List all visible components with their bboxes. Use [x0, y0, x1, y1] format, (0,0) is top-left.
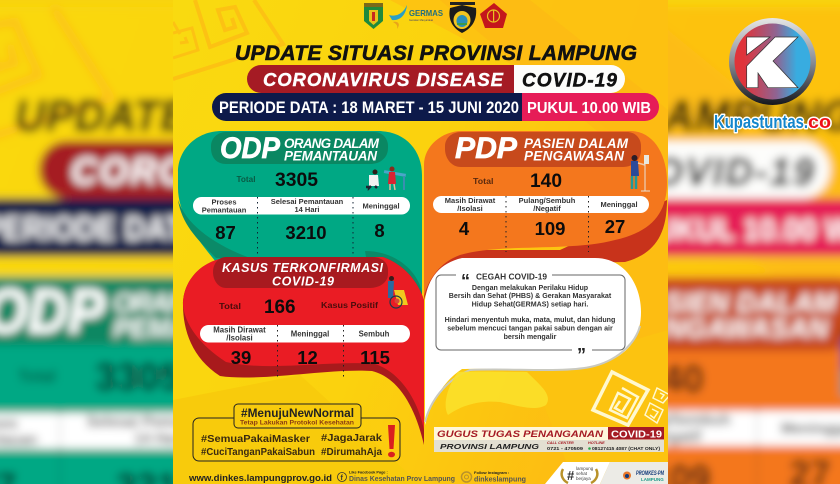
icon: lampung sehat: berjaya	[576, 476, 591, 481]
stat values: 8	[374, 220, 385, 241]
heading	[213, 257, 388, 288]
heading: PASIEN DALAM	[524, 136, 629, 151]
total	[219, 300, 378, 313]
poster	[173, 0, 670, 484]
stat values: 39	[231, 347, 251, 368]
stat values: 12	[297, 347, 318, 368]
panel: Cegah COVID-19: “	[461, 271, 470, 291]
blurred right background copy	[668, 7, 840, 484]
logo: Kupastuntas	[714, 18, 831, 132]
blurred left background copy	[0, 13, 173, 484]
heading: ODP	[220, 132, 281, 165]
stat labels pill: Proses	[211, 198, 237, 206]
panel: Cegah COVID-19: Dengan melakukan Perilaku Hidup	[472, 284, 589, 292]
decorative white spirals	[593, 372, 670, 425]
band: Gugus Tugas: GUGUS TUGAS PENANGANAN	[437, 429, 604, 440]
decorative spiral top-left	[173, 0, 283, 79]
total: 3305	[275, 170, 318, 191]
footer links: dinkeslampung	[474, 474, 526, 484]
banner: coronavirus disease: CORONAVIRUS DISEASE	[263, 69, 504, 90]
panel: Cegah COVID-19: Bersih dan Sehat (PHBS) & Gerakan Masyarakat	[449, 292, 612, 300]
icon: Promkes logo	[623, 471, 665, 482]
icon: K badge	[729, 18, 816, 105]
heading: COVID-19	[272, 274, 334, 288]
total: Total	[236, 174, 256, 184]
band: Gugus Tugas: 08127415 4087 (CHAT ONLY)	[592, 446, 661, 451]
footer logos	[545, 462, 668, 484]
stat labels pill: Selesai Pemantauan	[271, 197, 344, 206]
stat labels pill: /Isolasi	[226, 333, 253, 342]
total: 166	[264, 297, 296, 318]
panel: Cegah COVID-19: Hindari menyentuh muka, mata, mulut, dan hidung	[445, 316, 615, 324]
white bubble and map	[425, 258, 641, 425]
icon: wheelchair	[388, 276, 408, 308]
icon: patient with IV stand	[631, 155, 650, 191]
total	[473, 171, 562, 192]
hashtag box: Tetap Lakukan Protokol Kesehatan	[240, 420, 354, 426]
icon: GERMAS	[389, 5, 443, 29]
icon: GERMAS: Gerakan Masyarakat	[409, 18, 433, 22]
stat labels pill: Meninggal	[362, 202, 400, 210]
icon: doctor and patient	[366, 166, 406, 190]
total	[236, 170, 318, 191]
wordmark: co	[808, 111, 831, 132]
banner: periode data: PERIODE DATA : 18 MARET - 15 JUNI 2020	[219, 99, 519, 117]
stat labels pill: Pemantauan	[202, 205, 247, 214]
band: Gugus Tugas: PROVINSI LAMPUNG	[440, 442, 539, 451]
panel: Cegah COVID-19: Hidup Sehat(GERMAS) setiap hari.	[472, 300, 588, 308]
panel: Cegah COVID-19	[436, 274, 626, 354]
panel: PDP	[424, 131, 667, 300]
heading: PEMANTAUAN	[284, 148, 377, 164]
icon: Promkes logo: PROMKES-PM	[636, 471, 665, 477]
footer links: Like Facebook Page :	[349, 470, 388, 474]
band: Gugus Tugas: 0721 - 470509	[547, 446, 584, 451]
stat values: 109	[535, 218, 565, 239]
heading: PDP	[455, 132, 518, 165]
stat labels pill: Sembuh	[359, 330, 390, 338]
partner logos	[364, 2, 507, 33]
hashtag box: #SemuaPakaiMasker	[201, 433, 310, 445]
panel: Cegah COVID-19: sebelum mencuci tangan pakai sabun dengan air	[447, 324, 613, 332]
heading: KASUS TERKONFIRMASI	[222, 261, 384, 275]
banner: coronavirus disease: COVID-19	[522, 70, 617, 92]
footer links: Dinas Kesehatan Prov Lampung	[349, 474, 455, 483]
wordmark: co	[808, 111, 831, 132]
total: Total	[219, 301, 241, 311]
stat values: 27	[605, 216, 625, 237]
wordmark: Kupastuntas.	[714, 111, 808, 132]
stat labels pill: Masih Dirawat	[213, 326, 266, 334]
hashtag box: #MenujuNewNormal	[241, 408, 354, 420]
stat values	[459, 216, 625, 239]
total: Kasus Positif	[321, 300, 378, 310]
icon: facebook: f	[340, 475, 344, 482]
panel: Cegah COVID-19: ”	[577, 345, 586, 365]
stat values	[231, 351, 390, 364]
stat labels pill: Meninggal	[291, 330, 329, 338]
heading: PENGAWASAN	[524, 148, 624, 164]
footer links: www.dinkes.lampungprov.go.id	[188, 473, 332, 484]
icon: lampung sehat: lampung	[576, 466, 594, 471]
panel: ODP	[178, 131, 422, 305]
footer links	[188, 470, 526, 484]
band: Gugus Tugas: COVID-19	[611, 428, 662, 440]
icon: lampung sehat: sehat	[576, 471, 588, 476]
icon: facebook	[338, 472, 346, 482]
stat values: 4	[459, 218, 470, 239]
stat labels pill: Meninggal	[600, 200, 638, 209]
hashtag box	[193, 404, 400, 461]
stat labels pill	[433, 196, 649, 213]
stat values	[215, 220, 385, 243]
map of Lampung	[446, 372, 548, 415]
footer links: Follow Instagram :	[474, 470, 509, 475]
heading: ORANG DALAM	[284, 136, 380, 151]
hashtag box: #JagaJarak	[321, 432, 382, 444]
icon: TNI star	[480, 3, 507, 28]
title: UPDATE SITUASI PROVINSI LAMPUNG	[235, 42, 637, 65]
stat values: 87	[215, 222, 236, 243]
banner: periode data: PUKUL 10.00 WIB	[527, 100, 651, 117]
band: Gugus Tugas: CALL CENTER	[547, 441, 574, 445]
icon: exclamation mark	[388, 425, 395, 457]
stat labels pill: /Negatif	[533, 204, 561, 213]
banner: coronavirus disease	[247, 65, 625, 93]
icon: instagram	[462, 472, 472, 482]
band: Gugus Tugas	[434, 427, 664, 452]
hashtag box: #CuciTanganPakaiSabun	[201, 446, 315, 458]
stat values: 3210	[285, 222, 327, 243]
total: Total	[473, 176, 494, 186]
stat labels pill	[200, 325, 410, 342]
stat values: 115	[360, 347, 390, 368]
stat labels pill: Pulang/Sembuh	[519, 196, 576, 205]
icon: Promkes logo: LAMPUNG	[641, 477, 664, 482]
panel: Kasus Terkonfirmasi	[183, 251, 424, 445]
panel: Cegah COVID-19: bersih mengalir	[504, 333, 557, 341]
hashtag box: #DirumahAja	[321, 446, 382, 458]
stat labels pill: 14 Hari	[294, 205, 320, 214]
banner: periode data	[212, 93, 659, 121]
icon: police badge	[449, 2, 476, 33]
wordmark: Kupastuntas.	[714, 111, 808, 132]
icon: Lampung shield	[364, 3, 383, 29]
band: Gugus Tugas: HOTLINE	[588, 441, 605, 445]
heading	[211, 132, 388, 165]
icon: lampung sehat	[562, 466, 597, 483]
total: 140	[530, 171, 562, 192]
icon: GERMAS: GERMAS	[409, 8, 443, 18]
stat labels pill	[193, 197, 410, 214]
panel: Cegah COVID-19: CEGAH COVID-19	[476, 272, 547, 282]
icon: lampung sehat: #	[567, 468, 575, 483]
heading	[445, 132, 641, 167]
stat labels pill: /Isolasi	[457, 204, 483, 213]
stat labels pill: Masih Dirawat	[445, 196, 496, 205]
